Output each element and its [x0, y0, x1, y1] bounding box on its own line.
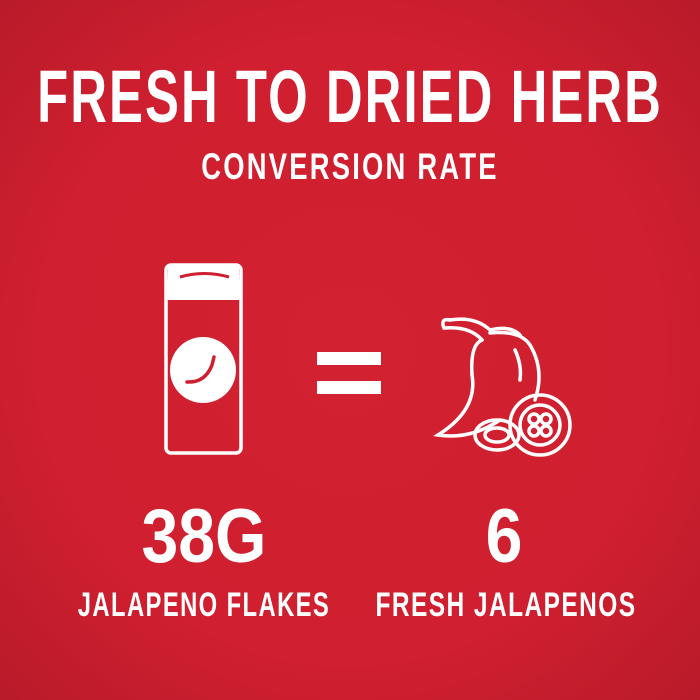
text: 38G: [142, 494, 266, 579]
text: FRESH JALAPENOS: [376, 586, 636, 624]
text: CONVERSION RATE: [201, 146, 499, 187]
icon: equals sign: [317, 352, 381, 394]
text: FRESH TO DRIED HERB: [37, 55, 663, 138]
icon: jalapenos: [433, 317, 572, 457]
text: 6: [486, 494, 522, 579]
icon: spice bottle: [164, 263, 243, 455]
text: JALAPENO FLAKES: [78, 586, 330, 624]
